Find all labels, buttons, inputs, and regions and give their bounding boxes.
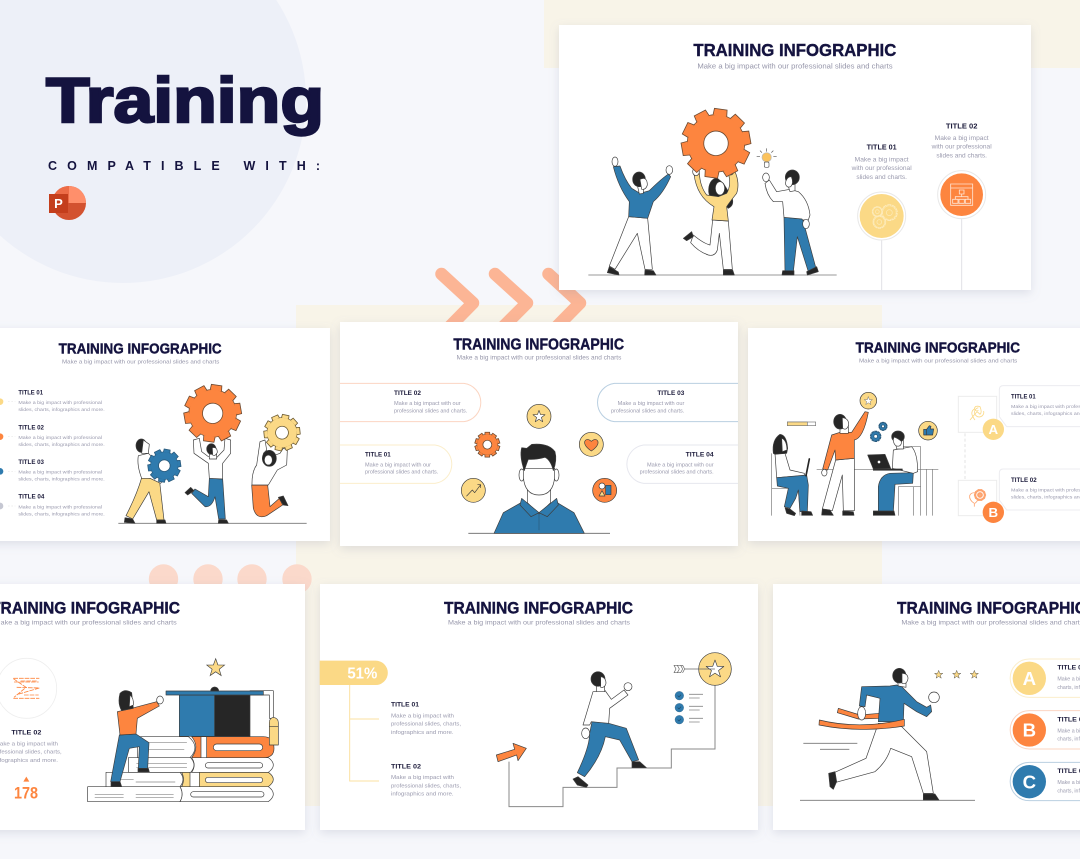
panel: slide middle left	[0, 328, 330, 541]
callout: title 01: professional slides and charts.	[365, 470, 438, 476]
stat: 178 up: 178	[14, 783, 38, 802]
callout: title 03: TITLE 03	[657, 391, 685, 397]
callout: title 03: professional slides and charts.	[611, 408, 684, 414]
timeline stems	[882, 219, 962, 290]
title 01 text: TITLE 01	[867, 142, 897, 151]
list item 01	[0, 390, 105, 413]
title 02 text	[931, 121, 992, 160]
callout: title 02: TITLE 02	[394, 391, 422, 397]
title 01 text: Make a big impact with	[391, 713, 454, 719]
callout: title 01: Make a big impact with our	[365, 462, 431, 468]
item C pill: C	[1023, 771, 1036, 792]
item A pill	[1010, 659, 1080, 697]
callout: title 02	[340, 383, 481, 422]
list item 02: slides, charts, infographics and more.	[18, 442, 105, 448]
item B: icon box and card: B	[989, 505, 999, 520]
progress bar	[787, 422, 816, 426]
title 01 text: professional slides, charts,	[391, 722, 462, 728]
stat: 178 up	[14, 777, 38, 802]
slide title: TRAINING INFOGRAPHIC	[59, 341, 222, 357]
list item 04: slides, charts, infographics and more.	[18, 512, 105, 518]
icon: yellow gears badge	[858, 192, 906, 240]
callout: title 03: Make a big impact with our	[618, 401, 685, 407]
callout: title 01	[340, 445, 452, 483]
slide subtitle: Make a big impact with our professional slides and charts	[448, 619, 631, 626]
title 02 text: Make a big impact	[935, 136, 989, 142]
figure: man in white shirt pointing	[763, 170, 818, 275]
list item 03: Make a big impact with professional	[18, 470, 102, 476]
icon: heart badge	[579, 432, 603, 456]
title 01 text: slides and charts.	[856, 175, 907, 181]
title 01 text	[851, 142, 912, 181]
stat: 51% tab: 51%	[347, 665, 377, 682]
icon: orange gear	[474, 432, 500, 457]
item A: icon box and card	[958, 386, 1080, 440]
main heading: Training	[46, 66, 324, 136]
title 02 text	[391, 763, 462, 798]
figure: man in blue with raised arms	[607, 157, 673, 275]
decorative salmon dots	[149, 564, 312, 594]
stacked books	[88, 737, 274, 802]
callout: title 04	[627, 445, 738, 483]
icon: orange arrow	[496, 743, 526, 762]
list item 01: slides, charts, infographics and more.	[18, 407, 105, 413]
figure: man climbing stairs	[573, 672, 646, 787]
icon: shapes badge	[593, 478, 617, 502]
title 01 text: Make a big impact	[855, 157, 909, 163]
callout: title 04: professional slides and charts.	[640, 470, 714, 476]
icon: orange gear	[180, 381, 246, 446]
background circle	[0, 0, 306, 283]
icon: large orange gear	[676, 104, 756, 182]
list item 02: Make a big impact with professional	[18, 435, 102, 441]
icon: thumbs up badge	[919, 421, 937, 440]
item C pill	[1010, 762, 1080, 801]
list item 02: TITLE 02	[18, 425, 45, 431]
ground line	[588, 274, 837, 276]
callout: title 04: Make a big impact with our	[647, 462, 714, 468]
title 02 text	[0, 729, 62, 764]
panel: slide bottom right	[773, 584, 1080, 830]
callout: title 01: TITLE 01	[365, 452, 391, 458]
slide subtitle: Make a big impact with our professional slides and charts	[697, 64, 893, 71]
figure: man in orange reaching up	[822, 412, 868, 515]
title 02 text: TITLE 02	[391, 763, 421, 770]
staircase	[509, 685, 715, 807]
item A: icon box and card: TITLE 01	[1011, 394, 1036, 400]
figure: seated woman with laptop	[773, 434, 813, 516]
chevron arrows	[442, 274, 580, 335]
slide subtitle: Make a big impact with our professional slides and charts	[901, 619, 1080, 626]
figure: running man crossing finish ribbon	[819, 668, 939, 800]
title 01 text: with our professional	[851, 166, 912, 172]
list item 04: TITLE 04	[18, 495, 45, 501]
item A pill: A	[1023, 668, 1036, 689]
title 02 text: infographics and more.	[391, 792, 454, 798]
title 02 text: slides and charts.	[936, 154, 987, 160]
icon: yellow gear	[260, 411, 304, 454]
icon: powerpoint logo: P	[54, 196, 63, 211]
panel: slide top right	[559, 25, 1031, 290]
panel: slide middle right	[748, 328, 1080, 541]
icon: target star badge with arrow	[674, 653, 731, 685]
slide subtitle: Make a big impact with our professional slides and charts	[457, 356, 621, 362]
cream block center	[296, 305, 882, 806]
cream block top right	[544, 0, 1080, 68]
panel: slide center	[340, 322, 738, 546]
list item 04: Make a big impact with professional	[18, 505, 102, 511]
bracket lines	[350, 685, 379, 781]
figure: woman lifting orange gear	[683, 167, 738, 275]
stat: 51% tab	[320, 661, 388, 685]
item B pill	[1010, 711, 1080, 749]
callout: title 02: professional slides and charts.	[394, 408, 467, 414]
icon: blue gear	[145, 447, 184, 485]
icons: small blue gears	[870, 422, 887, 442]
ground line	[118, 522, 307, 525]
panel: slide bottom center	[320, 584, 758, 830]
title 02 text: professional slides, charts,	[391, 783, 462, 789]
list item 03: TITLE 03	[18, 460, 45, 466]
icon: light bulb	[757, 148, 777, 167]
figure: woman jumping with yellow gear	[252, 440, 288, 517]
title 01 text: TITLE 01	[391, 702, 419, 709]
slide title: TRAINING INFOGRAPHIC	[453, 336, 624, 353]
table and chairs	[772, 447, 938, 516]
callout: title 02: Make a big impact with our	[394, 401, 461, 407]
icon: star badge	[860, 392, 877, 409]
list item 03: slides, charts, infographics and more.	[18, 477, 105, 483]
connector dashed line	[963, 433, 966, 480]
title 02 text: with our professional	[931, 145, 992, 151]
list item 04	[0, 495, 105, 518]
item B: icon box and card	[958, 469, 1080, 523]
slide title: TRAINING INFOGRAPHIC	[444, 598, 633, 617]
slide title: TRAINING INFOGRAPHIC	[856, 341, 1020, 357]
icon: star badge	[527, 404, 551, 428]
title 01 text	[391, 702, 462, 736]
item A: icon box and card: A	[989, 422, 999, 437]
callout: title 03	[598, 383, 738, 422]
icon: star	[207, 659, 225, 676]
item B: icon box and card: TITLE 02	[1011, 478, 1037, 484]
panel: slide bottom left	[0, 584, 305, 830]
ground and speed lines	[800, 743, 975, 800]
figure: man lifting orange gear	[185, 438, 231, 523]
icons: three stars	[935, 670, 978, 678]
checklist	[675, 691, 703, 724]
slide subtitle: Make a big impact with our professional slides and charts	[859, 359, 1018, 365]
figure: person carrying blue gear	[124, 439, 166, 523]
ground line	[468, 532, 610, 535]
list item 03	[0, 460, 105, 483]
list item 02	[0, 425, 105, 448]
title 02 text: Make a big impact with	[391, 775, 454, 781]
title 01 text: infographics and more.	[391, 730, 454, 736]
icon: circle with orange lines	[0, 658, 57, 718]
compatible with label: COMPATIBLE WITH:	[48, 159, 320, 173]
icon: powerpoint logo	[49, 186, 86, 220]
figure: person climbing books	[111, 691, 163, 787]
slide title: TRAINING INFOGRAPHIC	[693, 40, 896, 60]
icon: orange org chart badge	[938, 171, 986, 219]
figure: seated man at laptop	[868, 431, 918, 515]
list item 01: TITLE 01	[18, 390, 44, 396]
title 02 text: TITLE 02	[11, 729, 42, 736]
title 02 text: TITLE 02	[946, 121, 977, 130]
icon: growth chart badge	[461, 478, 485, 502]
figure: man portrait	[494, 444, 584, 533]
slide subtitle: Make a big impact with our professional slides and charts	[62, 359, 220, 365]
callout: title 04: TITLE 04	[686, 452, 714, 458]
item B pill: B	[1023, 720, 1036, 741]
list item 01: Make a big impact with professional	[18, 400, 102, 406]
graduation cap	[166, 687, 278, 745]
